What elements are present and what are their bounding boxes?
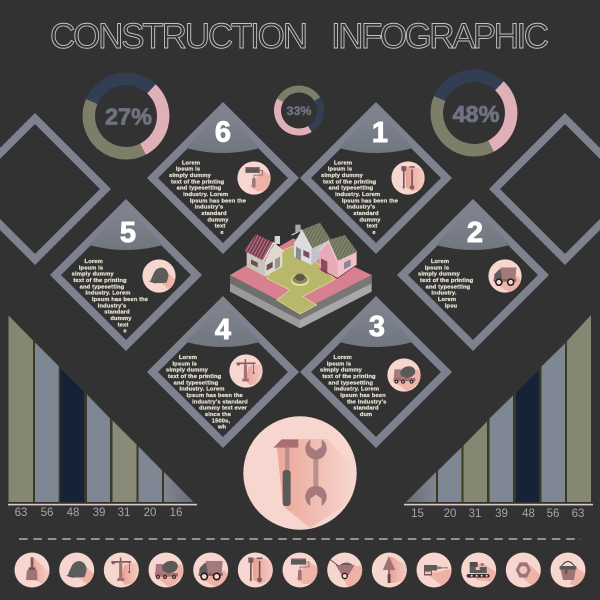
panel: step 5: 5: [120, 217, 136, 249]
panel: step 2: text of the printing: [420, 278, 474, 284]
icon: bucket: [550, 552, 586, 588]
panel: step 6: text: [215, 224, 225, 230]
panel: step 2: Ipsum is: [425, 265, 449, 271]
panel: step 3: simply dummy: [320, 368, 363, 374]
panel: step 1: Lorem: [334, 160, 352, 166]
left bar chart: 63: [15, 507, 27, 519]
panel: step 5: e: [123, 329, 127, 335]
panel: step 6: dummy: [207, 217, 229, 223]
left bar chart: 16: [170, 507, 182, 519]
panel: step 4: industry's standard: [192, 399, 248, 405]
left bar chart: 48: [67, 507, 79, 519]
panel: step 4: Ipsum is: [172, 361, 197, 367]
panel: step 2: and typesetting: [426, 284, 471, 290]
icon: concrete mixer: [148, 552, 186, 588]
panel: step 2: Ipsu: [445, 303, 458, 309]
panel: step 3: text of the printing: [322, 374, 376, 380]
donut chart: 27%: [73, 63, 179, 169]
panel: step 3: [306, 302, 446, 442]
panel: step 1: e: [372, 230, 376, 236]
right bar chart: 39: [495, 508, 508, 520]
panel: step 1: industry's: [347, 205, 375, 211]
panel: step 6: and typesetting: [177, 186, 222, 192]
icon: drill: [416, 552, 452, 588]
panel: step 1: standard: [353, 211, 379, 217]
panel: step 5: simply dummy: [72, 272, 114, 278]
donut chart: 33%: 33%: [286, 104, 312, 118]
panel: step 4: 1500s,: [212, 418, 230, 424]
panel: step 1: simply dummy: [321, 173, 364, 179]
icon row: [14, 552, 586, 588]
right bar chart: 48: [522, 508, 535, 520]
right bar chart: [404, 315, 593, 520]
panel: step 4: wh: [217, 425, 226, 431]
icon: nut: [506, 552, 541, 588]
panel: step 3: Lorem: [334, 355, 352, 361]
donut chart: 33%: [270, 81, 328, 140]
panel: step 6: Lorem: [182, 160, 200, 166]
panel: step 6: industry's: [195, 205, 223, 211]
panel: step 4: Ipsum has been the: [187, 393, 243, 399]
panel: step 5: standard: [104, 310, 130, 316]
panel: step 2: simply dummy: [418, 272, 461, 278]
left bar chart: [8, 315, 197, 519]
left bar chart: 39: [93, 507, 105, 519]
panel: step 2: industry.: [431, 291, 457, 297]
right bar chart: 31: [469, 508, 481, 520]
title: INFOGRAPHIC: [331, 17, 549, 56]
empty diamond frame right: [494, 118, 600, 260]
icon: crane: [104, 552, 139, 588]
icon: helmet: [59, 552, 95, 588]
icon: wheelbarrow: [327, 552, 363, 588]
panel: step 4: text of the printing: [168, 374, 222, 380]
icon: brush: [14, 552, 50, 588]
panel: step 2: 2: [467, 217, 483, 249]
panel: step 5: industry. Lorem: [85, 291, 131, 297]
right bar chart: 56: [547, 508, 559, 520]
panel: step 4: simply dummy: [166, 368, 209, 374]
panel: step 6: Ipsum has been the: [190, 198, 247, 204]
panel: step 4: 4: [215, 314, 231, 346]
panel: step 5: industry's: [98, 303, 126, 309]
panel: step 1: and typesetting: [329, 186, 374, 192]
panel: step 3: Ipsum is: [327, 361, 351, 367]
panel: step 6: e: [220, 230, 224, 236]
panel: step 1: [306, 108, 446, 248]
empty diamond frame left: [0, 118, 106, 260]
left bar chart: 20: [144, 507, 156, 519]
icon: trowel: [372, 552, 407, 588]
panel: step 3: industry. Lorem: [334, 387, 379, 393]
panel: step 4: Lorem: [179, 355, 197, 361]
icon: shovels: [238, 552, 273, 588]
donut chart: 48%: 48%: [452, 101, 500, 127]
panel: step 4: dummy text ever: [199, 406, 248, 412]
panel: step 2: Lorem: [431, 259, 449, 265]
panel: step 3: dum: [360, 412, 372, 418]
right bar chart: 20: [444, 508, 456, 520]
panel: step 4: [152, 302, 294, 442]
panel: step 5: dummy: [110, 316, 132, 322]
panel: step 4: industry. Lorem: [179, 387, 225, 393]
donut chart: 27%: 27%: [105, 104, 152, 130]
icon: bulldozer: [461, 552, 496, 588]
panel: step 1: Ipsum is: [328, 167, 352, 173]
icon: paint roller: [282, 552, 318, 588]
right bar chart: 63: [572, 508, 584, 520]
icon: hammer and wrench: [243, 416, 357, 530]
panel: step 6: 6: [215, 116, 231, 148]
panel: step 4: and typesetting: [174, 380, 219, 386]
panel: step 6: standard: [201, 211, 227, 217]
panel: step 5: [56, 204, 196, 346]
panel: step 5: Ipsum is: [79, 265, 103, 271]
panel: step 3: the industry's: [347, 399, 386, 405]
panel: step 3: Ipsum has been: [340, 393, 386, 399]
panel: step 5: text: [118, 322, 128, 328]
donut chart: 48%: [421, 60, 527, 166]
panel: step 4: since the: [205, 412, 232, 418]
panel: step 5: Lorem: [85, 259, 103, 265]
title: CONSTRUCTION: [50, 17, 308, 56]
panel: step 3: standard: [353, 406, 379, 412]
panel: step 1: 1: [372, 117, 388, 149]
left bar chart: 56: [41, 507, 53, 519]
panel: step 6: simply dummy: [169, 173, 212, 179]
panel: step 6: industry. Lorem: [183, 192, 228, 198]
panel: step 5: and typesetting: [80, 284, 125, 290]
left bar chart: 31: [118, 507, 130, 519]
panel: step 3: and typesetting: [328, 380, 373, 386]
panel: step 2: [402, 204, 544, 346]
panel: step 6: text of the printing: [171, 179, 225, 185]
panel: step 1: text of the printing: [323, 179, 377, 185]
isometric houses illustration: [230, 223, 372, 328]
panel: step 1: Ipsum has been the: [342, 198, 399, 204]
panel: step 2: Lorem: [438, 297, 456, 303]
title: [50, 17, 549, 56]
panel: step 5: Ipsum has been the: [92, 297, 149, 303]
icon: dump truck: [193, 552, 229, 588]
right bar chart: 15: [411, 508, 424, 520]
panel: step 1: text: [367, 224, 377, 230]
panel: step 1: dummy: [359, 217, 381, 223]
panel: step 5: text of the printing: [73, 278, 127, 284]
panel: step 1: industry. Lorem: [335, 192, 380, 198]
panel: step 3: 3: [369, 311, 385, 343]
panel: step 6: [152, 108, 294, 248]
panel: step 6: Ipsum is: [176, 167, 200, 173]
